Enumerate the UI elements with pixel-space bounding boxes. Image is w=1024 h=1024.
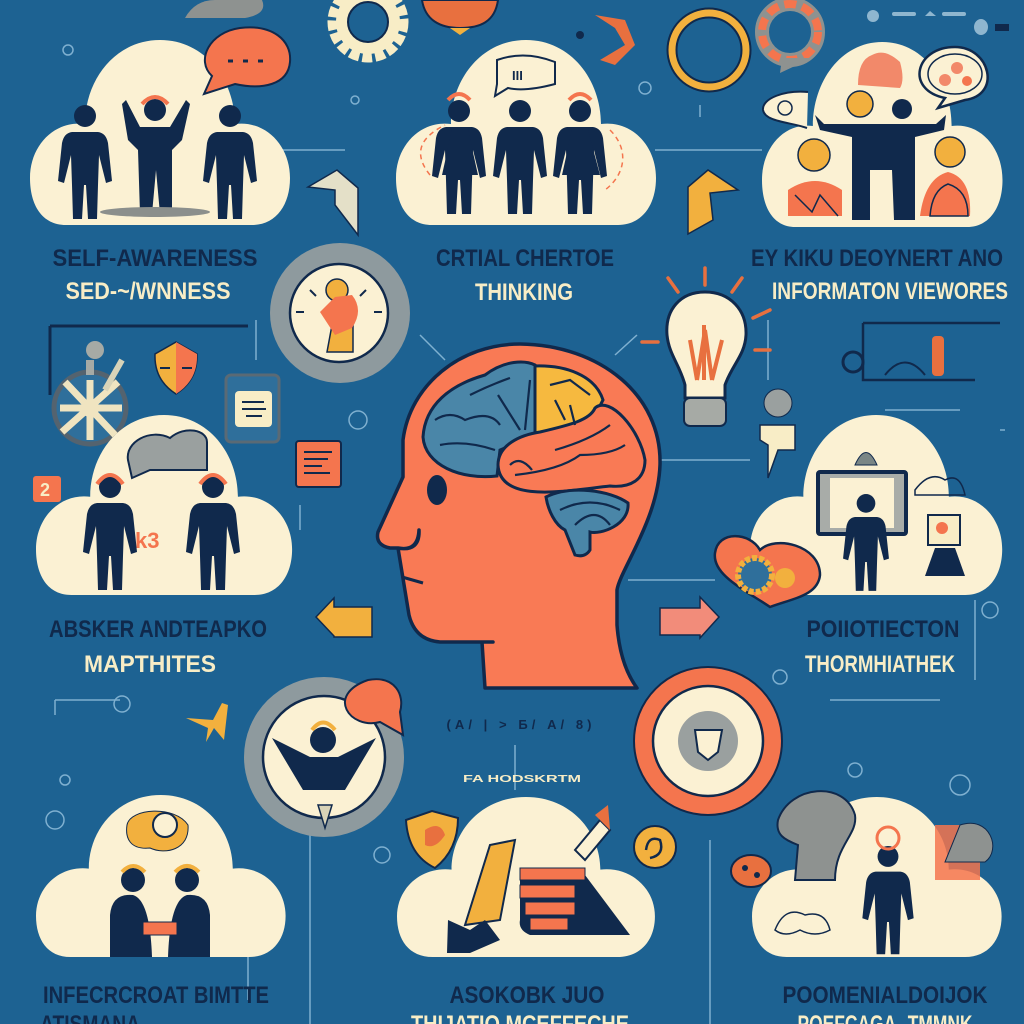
subheading: MAPTHITES [84,651,216,678]
people [83,475,240,590]
top grey cloud [185,0,263,18]
people: k3 [135,528,159,553]
cerebellum [546,490,628,556]
mouth [402,577,423,583]
panel: right mid [750,415,1002,595]
head with glasses [127,811,188,851]
small figure [760,389,795,478]
cloud 8 [752,797,1002,957]
small clouds outline [775,912,830,934]
screen person [818,452,906,591]
arrow: yellow [688,170,738,234]
badge 2 [33,476,61,502]
left bubble [763,92,808,128]
panel: bottom-right [752,791,1002,957]
panel: top-left frame and wheel [50,326,248,444]
subheading: SED-~/WNNESS [66,278,230,305]
panel: bottom-left mid [36,415,292,595]
heading: critical thinking: CRTIAL CHERTOE [436,245,614,272]
panel: information [762,42,1002,227]
lightbulb [642,268,770,426]
panel: self-awareness [30,27,290,225]
thought bubble [920,47,988,108]
brain: orange lobe [498,405,645,492]
cloud 4 [36,415,292,595]
small caption 2: FA HODSKRTM [463,773,581,785]
badge: shield [406,811,458,868]
cloud 7 [397,797,655,957]
arrow: pink right [660,597,719,638]
head with brain [378,344,660,688]
head outline [378,344,660,688]
small clouds [915,477,965,495]
cloud 5 [750,415,1002,595]
orange ring [672,13,746,87]
cloud 1 [30,40,290,225]
small top-right icons [867,10,1009,35]
speech icon: III [512,68,523,83]
heading: ABSKER ANDTEAPKO [49,616,267,643]
wheel icon [54,341,126,444]
heading: POIIOTIECTON [806,616,960,643]
heading: POOMENIALDOIJOK [782,982,988,1009]
statue head [777,791,855,880]
medallion: fist [270,243,410,383]
people [58,97,257,219]
small food icon [731,855,771,887]
two people [110,866,210,957]
subheading: THORMHIATHEK [805,651,956,678]
top gear [335,0,401,55]
heart with gear [715,536,820,607]
cloud 6 [36,795,286,957]
subheading: THINKING [475,279,573,306]
badge 2: 2 [40,480,50,500]
tablet icon [226,375,279,442]
small caption: (А/ | > Б/ А/ 8) [446,717,592,732]
cloud 2 [396,40,656,225]
decorative icons [46,45,998,863]
two people with arms out [815,91,946,220]
broken ring [762,4,818,73]
pencil hand [447,805,630,953]
medallion: person [244,677,404,837]
eye [427,475,447,505]
brain: blue lobe [423,362,536,477]
device [925,515,965,576]
heading: АSOKOBK JUO [450,982,604,1009]
arrow: grey [308,170,358,235]
top globe icon [422,0,498,35]
speech icon [495,55,555,96]
frame with chart [843,323,1000,380]
arrow: yellow left [316,598,372,637]
scattered shapes [576,15,635,65]
heading: self-awareness: SELF-AWARENESS [52,245,258,272]
people [421,94,623,214]
medallion: shield [634,667,782,815]
brain: yellow lobe [535,366,603,436]
heading: INFECRCROAT BIMTTE [43,982,269,1009]
folds [435,378,625,525]
person [862,823,993,954]
cloud 3 [762,42,1002,227]
seated figures [788,53,970,216]
grey bubble [128,430,207,478]
panel: bottom-center [397,797,655,957]
plane icon [186,703,228,742]
badge: circle [634,826,676,868]
panel: bottom-left [36,795,286,957]
document icon [296,441,341,487]
panel: critical thinking [396,40,656,225]
speech bubble [204,27,290,94]
shield [155,342,197,394]
